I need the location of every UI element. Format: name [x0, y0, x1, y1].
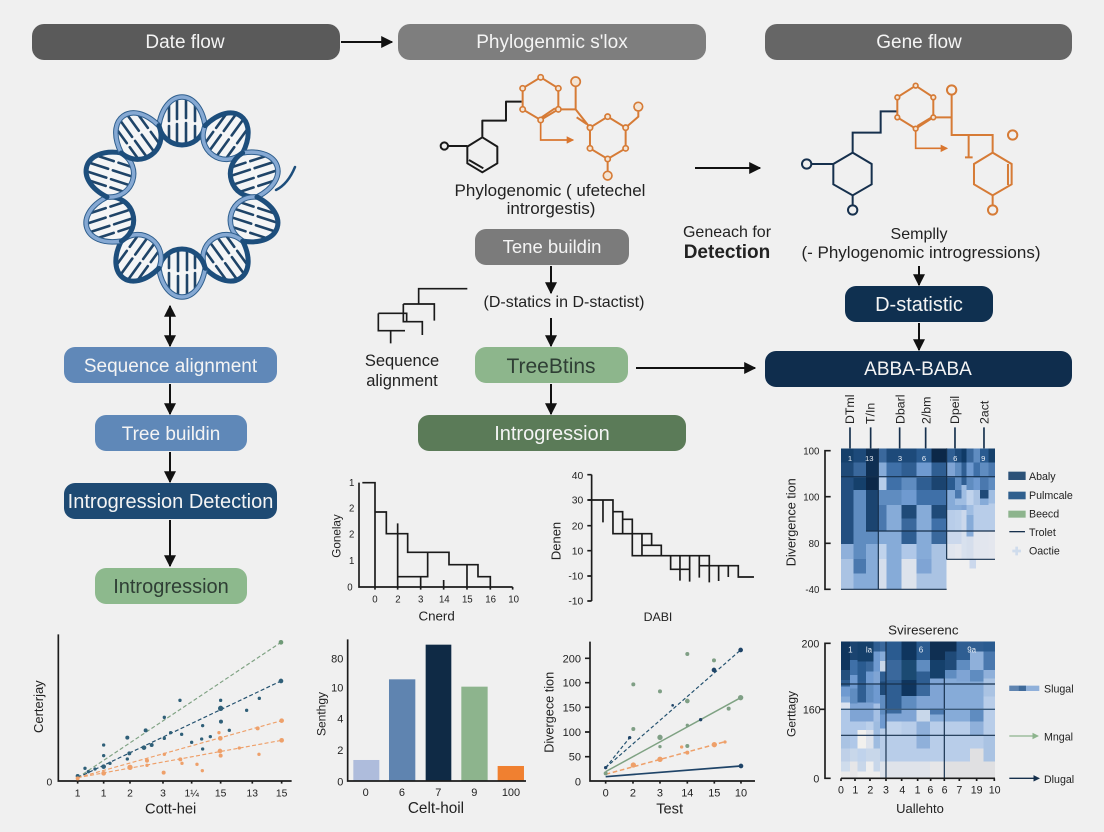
chart: step chart Cnerd: Cnerd	[418, 609, 455, 624]
chart: scatter plot Cott-hei: 15	[215, 788, 227, 799]
chart: step chart Cnerd	[331, 478, 519, 624]
chart: scatter plot Cott-hei: 2	[127, 788, 133, 799]
pill: Introgression Detection	[64, 483, 277, 519]
heatmap legend: Beecd	[1029, 508, 1059, 520]
pill: TreeBins	[475, 347, 628, 383]
pill: D-statistic	[845, 286, 993, 322]
chart: scatter plot Cott-hei: Certerjay	[31, 680, 46, 733]
heatmap legend: Pulmcale	[1029, 490, 1073, 502]
text: Semplly caption: Semplly	[891, 226, 947, 243]
chart: step chart DABI: Denen	[549, 522, 564, 560]
chart: top heatmap: Divergence tion	[784, 478, 798, 566]
chart: line chart Test: 0	[575, 777, 581, 789]
chart: top heatmap: Dpeil	[948, 396, 962, 424]
pill: TreeBins: TreeBtins	[506, 355, 596, 378]
chart: step chart Cnerd: 2	[349, 529, 354, 540]
chart: bottom heatmap Svireserenc: 19	[971, 785, 983, 797]
text: Sequence alignment caption	[365, 352, 439, 390]
pill: Tree buildin: Tree buildin	[122, 424, 220, 445]
chart: line chart Test: Test	[656, 801, 683, 817]
chart: bottom heatmap Svireserenc: 200	[802, 638, 819, 650]
pill: ABBA-BABA: ABBA-BABA	[864, 359, 972, 380]
chart: line chart Test: 14	[681, 787, 693, 799]
chart: top heatmap: 1	[848, 454, 852, 463]
text: molecule caption	[455, 181, 645, 218]
chart: top heatmap	[784, 395, 1073, 596]
chart: line chart Test: 3	[657, 787, 663, 799]
chart: bottom heatmap Svireserenc: 1	[848, 645, 853, 654]
chart: bottom heatmap Svireserenc: la	[866, 645, 873, 654]
heatmap title: Svireserenc	[888, 622, 959, 637]
pill: ABBA-BABA	[765, 351, 1072, 387]
heatmap legend	[1009, 683, 1074, 786]
chart: step chart DABI: 40	[572, 471, 584, 482]
chart: bottom heatmap Svireserenc: 10	[989, 785, 1001, 797]
chart: top heatmap: 2act	[978, 400, 992, 424]
pill: Tene buildin	[475, 229, 629, 265]
chart: top heatmap: 13	[865, 454, 874, 463]
text: Semplly caption: (- Phylogenomic introgressions)	[801, 243, 1041, 262]
chart: bottom heatmap Svireserenc	[785, 622, 1074, 816]
chart: top heatmap: DTml	[843, 395, 857, 424]
chart: top heatmap: 2/bm	[920, 397, 934, 424]
pill: Sequence alignment: Sequence alignment	[84, 356, 258, 377]
pill: Tene buildin: Tene buildin	[503, 236, 601, 257]
chart: top heatmap: 3	[898, 454, 902, 463]
pill: D-statistic: D-statistic	[875, 294, 963, 316]
chart: step chart Cnerd: 0	[347, 582, 353, 593]
arrow: tene to d-statics	[550, 266, 552, 293]
text: Sequence alignment caption: Sequence	[365, 352, 439, 370]
text: molecule caption: Phylogenomic ( ufetechel	[455, 181, 645, 200]
chart: step chart Cnerd: 1	[349, 556, 354, 567]
chart: bottom heatmap Svireserenc: 160	[803, 704, 821, 716]
chart: line chart Test: 0	[603, 787, 609, 799]
chart: scatter plot Cott-hei: 3	[160, 788, 166, 799]
chart: top heatmap: T/In	[864, 403, 878, 424]
pill: Sequence alignment	[64, 347, 277, 383]
chart: bar chart Celt-hoil: 80	[331, 653, 343, 665]
icon: middle molecule	[441, 75, 643, 180]
text: Sequence alignment caption: alignment	[366, 372, 438, 390]
chart: bar chart Celt-hoil: 4	[337, 713, 343, 725]
chart: bar chart Celt-hoil: 6	[399, 787, 405, 799]
text: Geneach for Detection: Detection	[684, 242, 770, 263]
chart: top heatmap: 9	[981, 454, 985, 463]
icon: right molecule	[802, 83, 1017, 215]
chart: bottom heatmap Svireserenc: Gerttagy	[785, 691, 799, 737]
heatmap cells	[841, 448, 995, 589]
chart: bar chart Celt-hoil	[314, 639, 526, 817]
chart: step chart Cnerd: 15	[462, 594, 473, 605]
chart: bottom heatmap Svireserenc: 7	[956, 785, 962, 797]
chart: bar chart Celt-hoil: Senthgy	[314, 692, 328, 736]
chart: step chart Cnerd: 0	[372, 594, 378, 605]
chart: line chart Test: 50	[569, 752, 581, 764]
heatmap legend: Oactie	[1029, 545, 1060, 557]
chart: step chart Cnerd: 2	[349, 504, 354, 515]
chart: scatter plot Cott-hei: Cott-hei	[145, 801, 196, 817]
chart: line chart Test: 100	[563, 727, 581, 739]
chart: line chart Test: 200	[563, 653, 581, 665]
chart: line chart Test: 10	[735, 787, 747, 799]
chart: step chart Cnerd: 14	[439, 594, 450, 605]
arrow: double-headed DNA to sequence alignment	[169, 306, 171, 346]
pill: Introgression dark green: Introgression	[494, 423, 610, 445]
pill: Introgression green	[95, 568, 247, 604]
chart: scatter plot Cott-hei	[31, 634, 292, 817]
chart: bar chart Celt-hoil: 10	[331, 683, 343, 695]
chart: top heatmap: 6	[922, 454, 926, 463]
arrow: treebins to introgression	[550, 384, 552, 414]
chart: line chart Test: 15	[708, 787, 720, 799]
chart: bottom heatmap Svireserenc: 1	[852, 785, 858, 797]
chart: bar chart Celt-hoil: 7	[435, 787, 441, 799]
chart: step chart Cnerd: 10	[508, 594, 519, 605]
chart: bottom heatmap Svireserenc: 0	[838, 785, 844, 797]
chart: step chart Cnerd: Gonelay	[331, 514, 344, 558]
chart: top heatmap: -40	[805, 585, 819, 596]
arrow: detection to introgression	[169, 520, 171, 566]
heatmap legend: Dlugal	[1044, 774, 1074, 786]
heatmap legend: Mngal	[1044, 731, 1073, 743]
header pill: Gene flow	[765, 24, 1072, 60]
chart: bottom heatmap Svireserenc: 6	[919, 645, 924, 654]
chart: step chart DABI	[549, 471, 754, 624]
arrow: d-statics to treebins	[550, 318, 552, 346]
icon: circular DNA helix	[80, 97, 295, 297]
chart: top heatmap: Dbarl	[893, 395, 907, 424]
text: Geneach for Detection	[683, 224, 772, 263]
chart: scatter plot Cott-hei: 13	[247, 788, 258, 799]
chart: step chart Cnerd: 3	[418, 594, 423, 605]
chart: bar chart Celt-hoil: 9	[471, 787, 477, 799]
pill: Introgression green: Introgression	[113, 576, 229, 598]
chart: scatter plot Cott-hei: 1	[75, 788, 81, 799]
chart: bottom heatmap Svireserenc: 3	[883, 785, 889, 797]
arrow: caption to D-statistic	[918, 266, 920, 285]
chart: bottom heatmap Svireserenc: 1	[915, 785, 921, 797]
chart: step chart DABI: 10	[572, 546, 584, 557]
text: D-statics: (D-statics in D-stactist)	[484, 294, 644, 311]
chart: step chart DABI: 30	[572, 496, 584, 507]
chart: scatter plot Cott-hei: 1	[101, 788, 107, 799]
chart: bottom heatmap Svireserenc: Uallehto	[896, 801, 944, 816]
chart: line chart Test: Divergece tion	[543, 672, 557, 753]
arrow: molecule middle to right	[695, 167, 760, 169]
heatmap legend: Trolet	[1029, 527, 1056, 539]
chart: bar chart Celt-hoil: 100	[502, 787, 520, 799]
arrow: header left to middle	[341, 41, 392, 43]
header pill: Gene flow: Gene flow	[876, 32, 962, 53]
chart: top heatmap: 100	[803, 492, 819, 503]
chart: bottom heatmap Svireserenc: 9a	[967, 645, 977, 654]
chart: step chart Cnerd: 1	[349, 478, 354, 489]
chart: step chart Cnerd: 16	[485, 594, 496, 605]
header pill: Phylogenmic s'lox	[398, 24, 706, 60]
pill: Introgression dark green	[418, 415, 686, 451]
chart: line chart Test	[543, 642, 755, 817]
chart: top heatmap: 100	[803, 446, 819, 457]
arrow: D-statistic to ABBA-BABA	[918, 323, 920, 350]
chart: scatter plot Cott-hei: 15	[276, 788, 288, 799]
chart: bottom heatmap Svireserenc: 6	[942, 785, 948, 797]
chart: step chart DABI: DABI	[644, 610, 672, 624]
text: molecule caption: introrgestis)	[507, 199, 595, 218]
text: Semplly caption	[801, 226, 1041, 262]
header pill: Phylogenmic s'lox: Phylogenmic s'lox	[476, 32, 628, 53]
icon: small phylogenetic tree	[378, 289, 467, 343]
chart: bottom heatmap Svireserenc: 2	[867, 785, 873, 797]
chart: top heatmap: 6	[953, 454, 957, 463]
chart: step chart DABI: 20	[572, 521, 584, 532]
chart: line chart Test: 150	[563, 702, 581, 714]
pill: Tree buildin	[95, 415, 247, 451]
chart: step chart DABI: -10	[568, 572, 584, 583]
chart: bar chart Celt-hoil: 0	[363, 787, 369, 799]
heatmap legend: Slugal	[1044, 683, 1074, 695]
chart: line chart Test: 100	[563, 678, 581, 690]
text: Geneach for Detection: Geneach for	[683, 224, 772, 241]
arrow: treebins to ABBA-BABA	[636, 367, 755, 369]
chart: top heatmap: 80	[809, 539, 819, 550]
arrow: tree to detection	[169, 452, 171, 482]
chart: bottom heatmap Svireserenc: 6	[927, 785, 933, 797]
chart: line chart Test: 2	[630, 787, 636, 799]
heatmap cells	[841, 642, 995, 778]
chart: step chart Cnerd: 2	[395, 594, 401, 605]
chart: bottom heatmap Svireserenc: 0	[813, 773, 819, 785]
chart: scatter plot Cott-hei: 1¼	[184, 787, 199, 799]
chart: bottom heatmap Svireserenc: 4	[899, 785, 905, 797]
chart: step chart DABI: -10	[568, 597, 584, 608]
arrow: alignment to tree	[169, 384, 171, 414]
chart: bar chart Celt-hoil: 2	[337, 745, 343, 757]
header pill: Date flow	[32, 24, 340, 60]
heatmap legend: Abaly	[1029, 471, 1056, 483]
pill: Introgression Detection: Introgression Detection	[68, 491, 273, 513]
header pill: Date flow: Date flow	[145, 32, 225, 53]
heatmap legend	[1008, 471, 1073, 557]
chart: bar chart Celt-hoil: Celt-hoil	[408, 800, 464, 817]
chart: bar chart Celt-hoil: 0	[337, 777, 343, 789]
chart: scatter plot Cott-hei: 0	[46, 777, 52, 788]
